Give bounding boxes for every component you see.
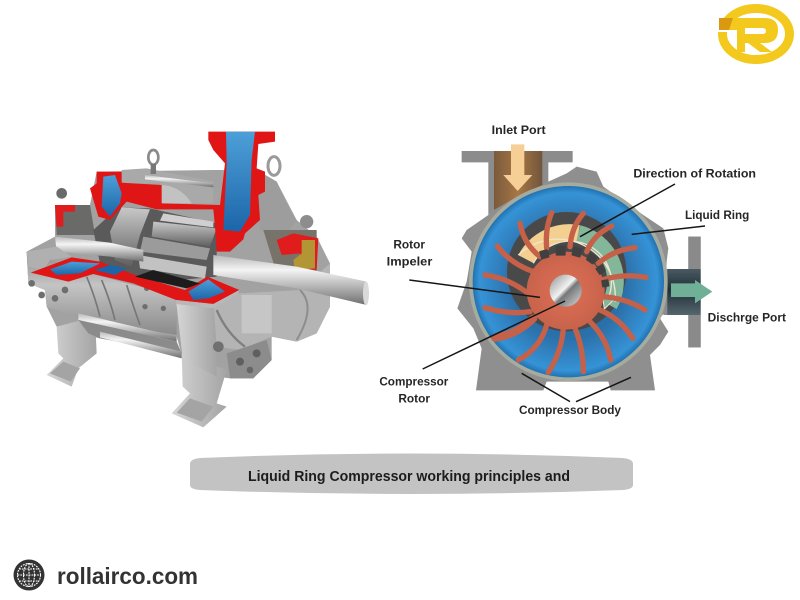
label: compressor rotor: Compressor: [379, 375, 449, 389]
discharge port flange: [663, 237, 701, 347]
label: discharge port: Dischrge Port: [708, 310, 786, 324]
compression band green: [578, 233, 615, 305]
label: liquid ring: Liquid Ring: [685, 208, 749, 222]
working principle diagram: [379, 123, 786, 417]
cylinder bolts: [28, 280, 166, 311]
liquid ring: [473, 186, 664, 377]
label: compressor body: Compressor Body: [519, 403, 621, 417]
discharge channel: [667, 269, 701, 315]
lower blue channels: [50, 262, 100, 275]
tie rod top: [145, 175, 213, 187]
left shaft: [55, 237, 143, 262]
upper red casing: [90, 132, 275, 252]
rotation arrowhead: [603, 297, 615, 309]
diagram labels: [379, 123, 786, 417]
lower red section: [31, 257, 239, 304]
footer website: [14, 560, 198, 590]
label: direction of rotation: Direction of Rotation: [633, 166, 756, 180]
label: compressor rotor: Rotor: [398, 392, 430, 406]
right leg: [172, 353, 227, 427]
rear grey housing: [122, 168, 213, 203]
label: rotor impeler: Impeler: [387, 255, 433, 269]
impeller blades: [485, 213, 646, 372]
label: rotor impeler: [387, 237, 433, 269]
inlet channel: [494, 151, 542, 210]
bolts cluster: [227, 340, 272, 378]
front block: [176, 300, 217, 377]
inlet port flange: [462, 151, 573, 215]
label: inlet port: Inlet Port: [492, 123, 546, 137]
compression band yellow: [526, 233, 578, 259]
blue channel left: [102, 175, 122, 217]
lifting eye left: [148, 150, 158, 165]
leader lines: [409, 184, 705, 402]
flow arc lines: [518, 239, 615, 302]
lower left casing: [27, 247, 72, 270]
machine silhouette: [27, 170, 330, 378]
right cylinder: [213, 263, 330, 350]
rotor shaft: [550, 275, 582, 307]
inlet arrow: [503, 144, 532, 191]
right shaft: [213, 255, 367, 305]
label: compressor rotor: [379, 375, 449, 406]
discharge arrow: [671, 280, 712, 303]
front flange: [176, 290, 239, 308]
caption pill: Liquid Ring Compressor working principles and: [248, 469, 570, 485]
caption pill: [190, 454, 633, 494]
logo: [715, 8, 790, 60]
gas pocket: [507, 212, 626, 331]
compressor cutaway illustration: [27, 132, 369, 427]
rotor hub: [527, 252, 605, 330]
impeller: [93, 207, 217, 283]
icon: globe: [14, 560, 44, 590]
hub slots: [539, 246, 610, 288]
casing rim: [469, 182, 668, 381]
main cylinder: [27, 252, 177, 335]
label: rotor impeler: Rotor: [393, 237, 425, 251]
lifting eye right: [268, 157, 280, 175]
footer website: rollairco.com: [57, 563, 198, 589]
left leg: [47, 317, 97, 387]
compressor body: [457, 167, 668, 390]
lower tie rods: [78, 313, 177, 342]
left and right seal housings: [55, 205, 95, 235]
blue channel right: [223, 132, 255, 232]
